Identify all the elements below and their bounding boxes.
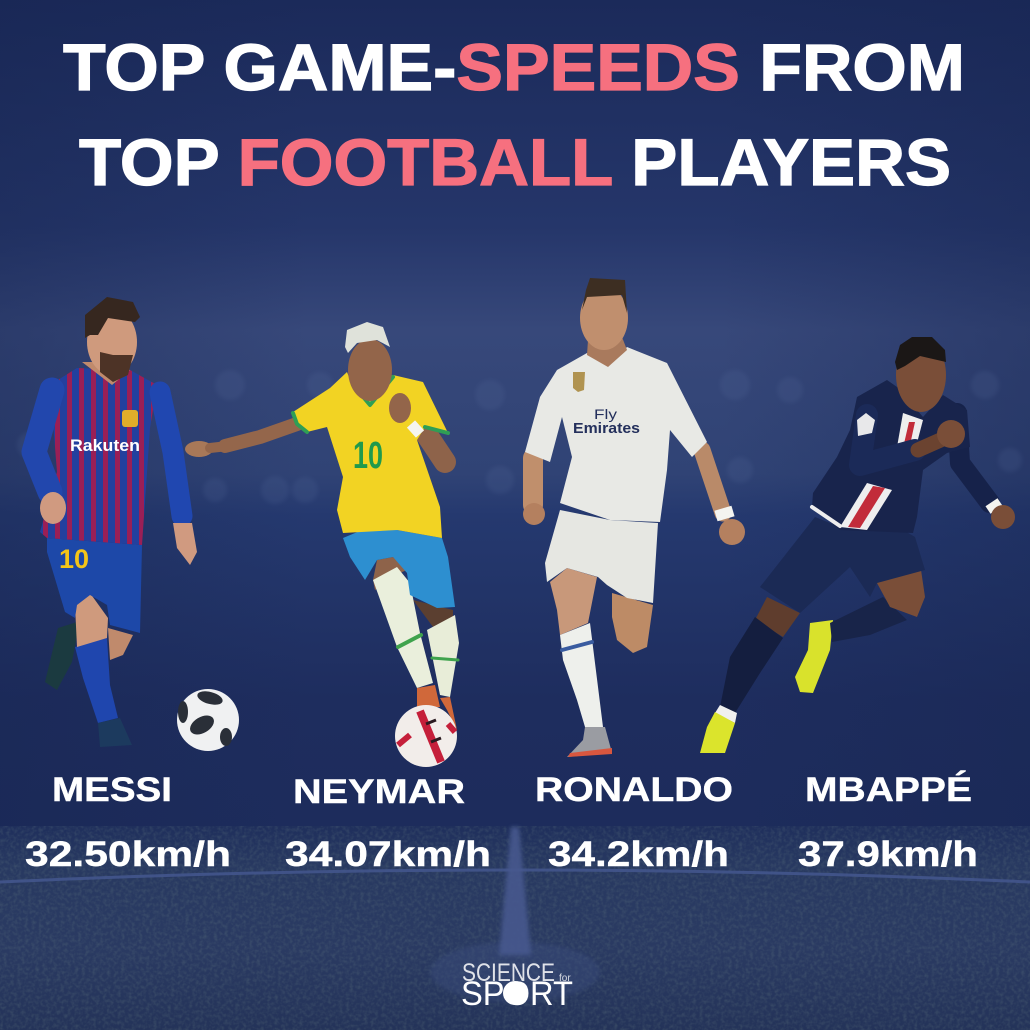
logo word: for: for xyxy=(559,973,571,984)
shorts xyxy=(545,510,658,603)
ball: Neymar xyxy=(395,705,457,767)
beard xyxy=(100,352,133,382)
right arm xyxy=(160,392,182,516)
left arm xyxy=(34,390,52,492)
wristband xyxy=(411,424,420,434)
back foot xyxy=(45,622,77,690)
back sock xyxy=(830,597,907,642)
shorts number: 10 xyxy=(59,544,89,574)
logo ball xyxy=(503,981,527,1005)
title line 1: TOP GAME- SPEEDS FROM xyxy=(63,30,965,104)
left fist xyxy=(523,503,545,525)
jersey xyxy=(40,368,157,545)
boot xyxy=(567,727,612,757)
title xyxy=(63,30,965,199)
speed: Neymar: 34.07km/h xyxy=(285,835,491,874)
front sock xyxy=(75,638,118,723)
left hand xyxy=(185,441,213,457)
player labels xyxy=(25,771,978,874)
right hand xyxy=(389,393,411,423)
left arm xyxy=(523,458,543,505)
right arm xyxy=(702,450,723,513)
back boot xyxy=(795,620,833,693)
name: Neymar: NEYMAR xyxy=(293,773,465,811)
speed: Ronaldo: 34.2km/h xyxy=(548,835,729,874)
player: Neymar xyxy=(185,322,459,730)
left arm xyxy=(225,424,297,446)
face xyxy=(87,309,137,375)
sponsor: Rakuten xyxy=(70,436,140,455)
hair xyxy=(345,322,390,353)
crest xyxy=(122,410,138,427)
neck xyxy=(587,337,627,367)
player: Ronaldo xyxy=(523,278,745,757)
shirt number: 10 xyxy=(353,435,383,477)
hem xyxy=(812,507,840,526)
front thigh xyxy=(550,568,597,635)
hair xyxy=(582,278,627,313)
front sock band xyxy=(398,635,421,647)
front knee xyxy=(75,593,108,647)
sock xyxy=(560,623,603,727)
upper stripe xyxy=(897,413,923,447)
title line 2: TOP FOOTBALL PLAYERS xyxy=(79,125,951,199)
lower stripe xyxy=(840,483,892,530)
left arm xyxy=(860,415,915,465)
right hand xyxy=(173,523,197,565)
player: Messi xyxy=(34,297,197,747)
knee xyxy=(877,563,925,617)
logo: Science for Sport xyxy=(461,959,573,1013)
back thigh xyxy=(108,628,133,660)
back sock band xyxy=(432,658,458,660)
sponsor: Fly: Fly xyxy=(594,406,617,422)
logo word: sport: SPORT xyxy=(461,975,573,1013)
front thigh xyxy=(755,597,800,637)
hair xyxy=(895,337,946,370)
neck xyxy=(82,362,130,385)
face xyxy=(580,286,628,350)
wristband xyxy=(716,511,733,516)
front thigh xyxy=(373,557,407,590)
front sock xyxy=(720,617,783,713)
shorts xyxy=(47,538,142,633)
jersey xyxy=(812,380,970,533)
right arm xyxy=(957,413,990,503)
ball: Messi xyxy=(177,689,239,751)
front shoe xyxy=(98,718,132,747)
shorts xyxy=(760,517,925,613)
sponsor: Emirates: Emirates xyxy=(573,420,640,437)
shorts xyxy=(343,528,455,608)
player: Mbappé xyxy=(700,337,1015,753)
jersey xyxy=(293,372,448,538)
back thigh xyxy=(413,600,453,627)
white sock xyxy=(715,705,737,723)
speed: Mbappé: 37.9km/h xyxy=(798,835,978,874)
right forearm xyxy=(425,432,445,462)
face xyxy=(896,338,946,412)
right hand xyxy=(991,505,1015,529)
jersey xyxy=(525,347,707,522)
left fist xyxy=(937,420,965,448)
name: Mbappé: MBAPPÉ xyxy=(805,771,972,809)
name: Ronaldo: RONALDO xyxy=(535,771,733,809)
face xyxy=(348,339,392,401)
front sock xyxy=(373,567,433,688)
back sock xyxy=(427,615,459,697)
collar and trim xyxy=(293,377,448,433)
right fist xyxy=(719,519,745,545)
back thigh xyxy=(612,593,653,653)
sock band xyxy=(562,642,592,650)
forearm xyxy=(918,438,945,450)
hair xyxy=(85,297,140,338)
left hand xyxy=(40,492,66,524)
name: Messi: MESSI xyxy=(52,771,172,809)
wristband xyxy=(988,502,1000,510)
front boot xyxy=(700,712,735,753)
badge xyxy=(573,372,585,392)
shoes xyxy=(417,685,457,730)
speed: Messi: 32.50km/h xyxy=(25,835,231,874)
patch xyxy=(857,413,875,436)
logo word: science: SCIENCE xyxy=(462,959,555,987)
